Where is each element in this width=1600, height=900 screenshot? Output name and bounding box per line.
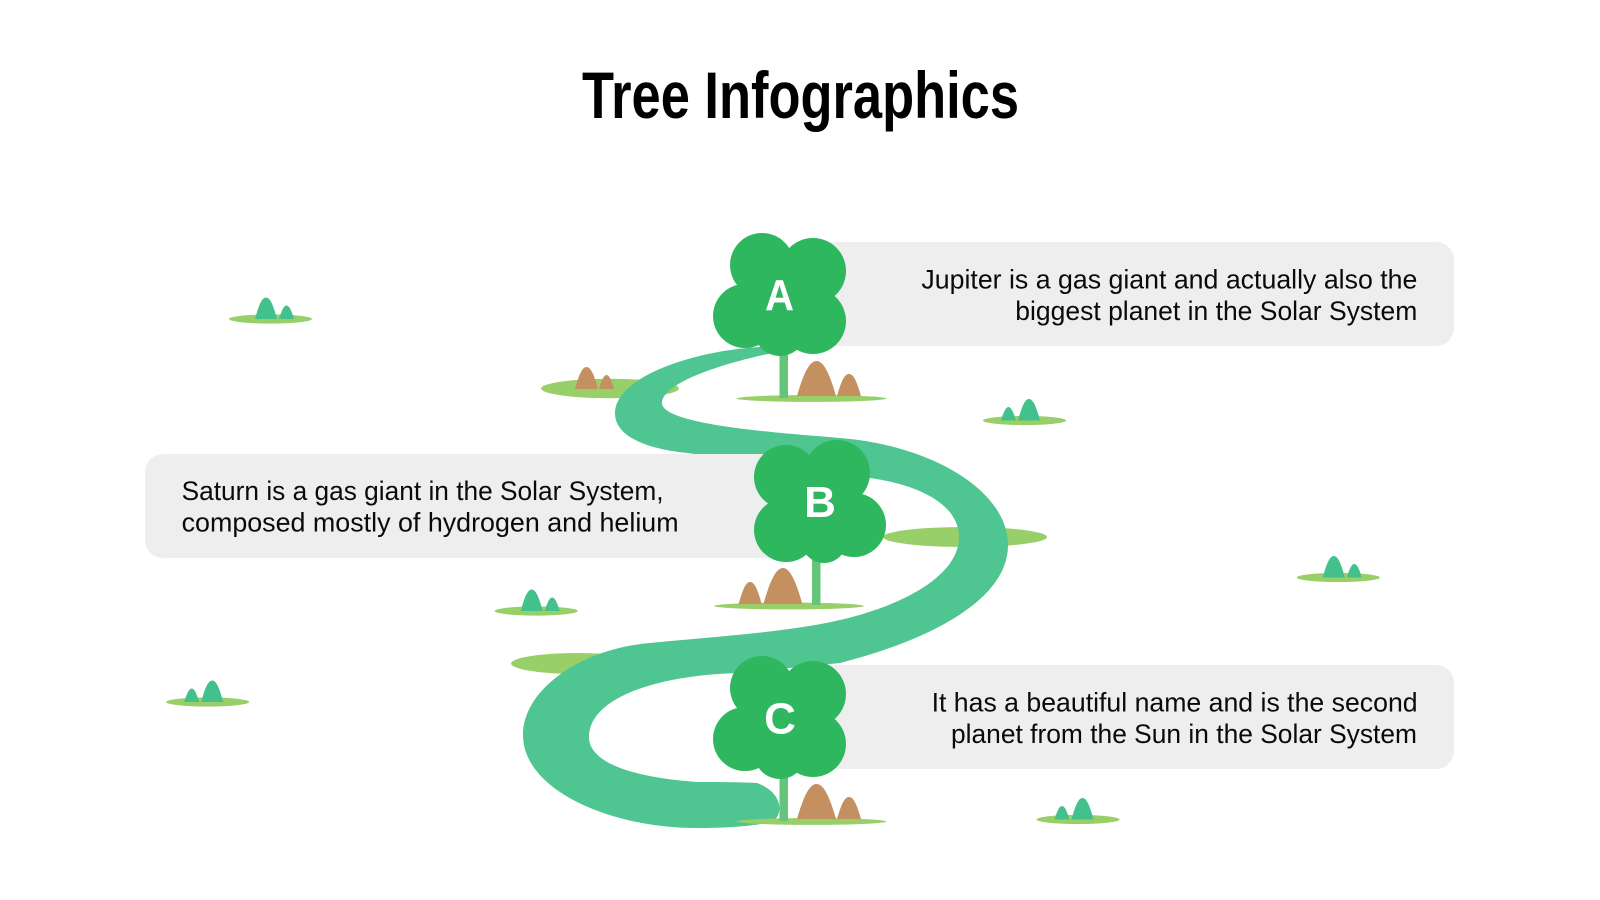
trunk C [780, 763, 788, 821]
decoration: grass clump right of tree A [983, 399, 1066, 425]
title: Tree Infographics [582, 58, 1019, 132]
text block A: Jupiter is a gas giant and actually also the [921, 264, 1417, 294]
island behind path, lower left [511, 653, 645, 674]
hills A [797, 361, 861, 396]
island with brown hills, upper left of path [541, 367, 679, 398]
winding path [523, 345, 1008, 828]
hills C [797, 784, 861, 819]
text block B [182, 476, 679, 538]
panel: text box B [145, 454, 805, 558]
ground C [736, 818, 886, 825]
text block C [932, 688, 1418, 749]
island behind path, right [883, 527, 1047, 547]
crown A [713, 233, 846, 356]
text block B: Saturn is a gas giant in the Solar System, [182, 476, 664, 506]
crown C [713, 656, 846, 779]
tree B [714, 440, 886, 609]
trunk A [780, 340, 788, 398]
text block A: biggest planet in the Solar System [1015, 296, 1417, 326]
decoration: grass clump lower left [166, 680, 249, 707]
decoration: grass clump far right [1297, 556, 1380, 582]
text block C: It has a beautiful name and is the second [932, 688, 1418, 718]
decoration: grass clump bottom right [1036, 798, 1120, 824]
ground B [714, 603, 864, 609]
letter A: A [765, 271, 794, 320]
panel: text box A [790, 242, 1454, 346]
letter B: B [804, 478, 836, 527]
ground A [736, 395, 886, 402]
trunk B [812, 550, 820, 605]
decoration: grass clump top left [229, 298, 312, 324]
tree A [713, 233, 886, 402]
text block C: planet from the Sun in the Solar System [951, 719, 1417, 749]
letter C: C [764, 694, 796, 744]
text block A [921, 264, 1417, 326]
tree C [713, 656, 886, 825]
text block B: composed mostly of hydrogen and helium [182, 508, 679, 538]
hills B [739, 568, 802, 604]
panel: text box C [790, 665, 1454, 769]
crown B [754, 440, 886, 563]
decoration: grass clump below box B [495, 590, 578, 616]
